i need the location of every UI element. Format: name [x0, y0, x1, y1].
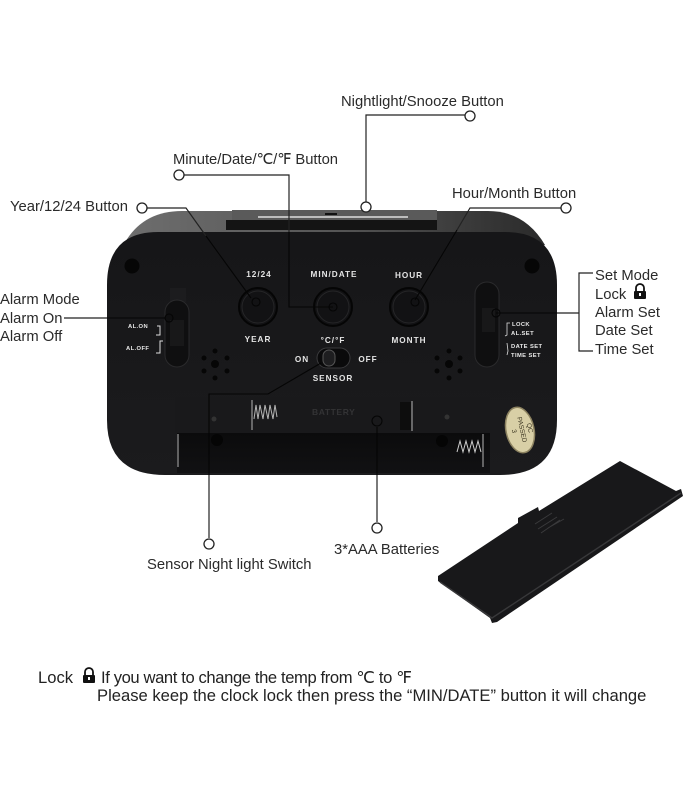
round buttons with labels: °C/°F: [321, 336, 345, 345]
note about temperature unit: [38, 668, 646, 705]
round buttons with labels: [239, 270, 428, 345]
QC passed sticker: [502, 405, 538, 455]
round buttons with labels: 12/24: [246, 270, 272, 279]
callout: batteries: [334, 416, 439, 558]
icon: lock small: [83, 668, 95, 683]
sensor switch: [295, 348, 378, 383]
QC passed sticker: PASSED: [515, 416, 528, 443]
right set mode switch: [475, 282, 542, 367]
note about temperature unit: If you want to change the temp from ℃ to ℉: [101, 668, 412, 687]
springs and contacts: [178, 400, 483, 467]
callout: year 12/24 button: [10, 199, 260, 306]
battery compartment: [175, 397, 490, 473]
sensor switch: SENSOR: [313, 374, 353, 383]
compartment marking: BATTERY: [312, 407, 355, 417]
callout: hour/month button: [411, 186, 576, 306]
icon: lock: [634, 284, 646, 299]
battery cover: [438, 461, 683, 623]
note about temperature unit: Please keep the clock lock then press the “MIN/DATE” button it will change: [97, 686, 646, 705]
callout: minute/date button: Minute/Date/℃/℉ Button: [173, 152, 338, 168]
screw holes: [124, 258, 540, 274]
callout: set mode: Lock: [595, 287, 627, 303]
QC passed sticker: 3: [510, 429, 518, 434]
right set mode switch: LOCK: [512, 322, 530, 328]
callout: sensor night light switch: Sensor Night light Switch: [147, 557, 312, 573]
clock body: [107, 210, 557, 475]
callout: set mode: Time Set: [595, 342, 654, 358]
left alarm switch: [126, 288, 189, 367]
left alarm switch: AL.ON: [128, 324, 148, 330]
note about temperature unit: Lock: [38, 668, 74, 687]
callout: batteries: 3*AAA Batteries: [334, 542, 439, 558]
round buttons with labels: HOUR: [395, 271, 423, 280]
callout: alarm mode: Alarm Off: [0, 329, 63, 345]
speaker holes: [202, 348, 462, 380]
callout: set mode: Date Set: [595, 323, 653, 339]
top nightlight button: [226, 210, 437, 230]
callout: nightlight/snooze button: [341, 94, 504, 212]
callout: hour/month button: Hour/Month Button: [452, 186, 576, 202]
right set mode switch: DATE SET: [511, 344, 542, 350]
callout: alarm mode: Alarm On: [0, 311, 62, 327]
sensor switch: OFF: [358, 355, 378, 364]
round buttons with labels: YEAR: [245, 335, 271, 344]
callout: nightlight/snooze button: Nightlight/Snooze Button: [341, 94, 504, 110]
callout: set mode: Alarm Set: [595, 305, 660, 321]
callout: year 12/24 button: Year/12/24 Button: [10, 199, 128, 215]
left alarm switch: AL.OFF: [126, 346, 149, 352]
clock front face: [107, 232, 557, 475]
callout: minute/date button: [173, 152, 338, 311]
callout: sensor night light switch: [147, 363, 321, 573]
callout: set mode: Set Mode: [595, 268, 658, 284]
round buttons with labels: MIN/DATE: [311, 270, 357, 279]
sensor switch: ON: [295, 355, 309, 364]
right set mode switch: TIME SET: [511, 353, 541, 359]
right set mode switch: AL.SET: [511, 331, 534, 337]
callout: set mode: [492, 268, 660, 358]
clock rear shell: [122, 211, 545, 250]
round buttons with labels: MONTH: [391, 336, 427, 345]
QC passed sticker: QC: [525, 423, 534, 434]
callout: alarm mode: [0, 292, 173, 345]
callout: alarm mode: Alarm Mode: [0, 292, 80, 308]
